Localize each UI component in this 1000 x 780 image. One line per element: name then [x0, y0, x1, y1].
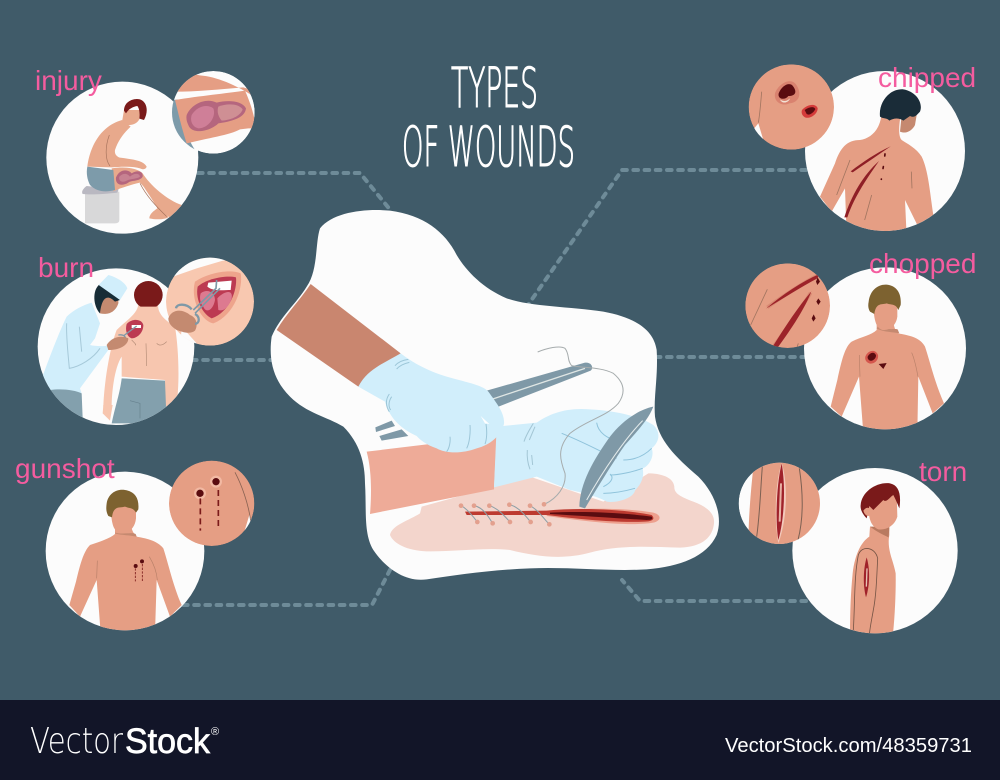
footer bar: VectorStock.com/48359731 [725, 735, 972, 757]
big circle: torn [792, 468, 958, 633]
suture thread [538, 347, 623, 504]
figure: man with bullet wounds on chest [69, 490, 182, 633]
label: injury: injury [35, 65, 102, 96]
central illustration: suturing a wound [271, 210, 719, 580]
footer bar: Vector [30, 721, 123, 762]
title [402, 56, 575, 179]
stitches [459, 502, 552, 527]
footer bar: Stock [125, 722, 210, 761]
white blob panel [271, 210, 719, 580]
label: burn: burn [38, 252, 94, 283]
small circle: chopped close-up [745, 263, 830, 350]
label: chipped: chipped [878, 62, 976, 93]
panel: torn [739, 462, 958, 637]
small circle: torn close-up [739, 462, 823, 547]
label: chopped: chopped [869, 248, 976, 279]
text: OF WOUNDS [402, 115, 575, 179]
light forearm [367, 436, 497, 514]
label: torn: torn [919, 456, 967, 487]
panel: gunshot [46, 461, 257, 633]
upper glove [358, 353, 504, 452]
needle holder [579, 407, 653, 508]
small circle: bullet holes close-up [169, 461, 257, 546]
panel: chipped [749, 64, 965, 237]
panel: burn [37, 250, 254, 425]
wound [465, 509, 660, 524]
panel: injury [46, 70, 257, 234]
small circle: burn close-up [166, 258, 254, 346]
big circle: chopped [804, 267, 966, 429]
panel: chopped [745, 263, 966, 433]
footer bar: ® [211, 726, 219, 738]
skin area around wound [390, 473, 714, 557]
figures: doctor treating patient [37, 275, 178, 423]
small circle: chipped close-up [749, 64, 834, 150]
figure: man with chest wounds [831, 285, 944, 433]
dark forearm [277, 284, 401, 387]
lower glove [494, 409, 658, 502]
figure: seated man with leg wound [82, 99, 183, 223]
title: TYPES [451, 56, 538, 120]
label: gunshot: gunshot [15, 453, 115, 484]
forceps [375, 363, 592, 441]
big circle: burn [38, 268, 194, 425]
figure: man from behind with slash wounds [820, 89, 933, 237]
figure: man in profile with arm wound [850, 483, 900, 637]
small circle: burn injury close-up [170, 70, 257, 154]
big circle: gunshot [46, 472, 204, 630]
big circle: chipped [805, 71, 965, 231]
footer bar [0, 700, 1000, 780]
big circle: injury [46, 82, 198, 234]
connector lines [183, 170, 806, 605]
